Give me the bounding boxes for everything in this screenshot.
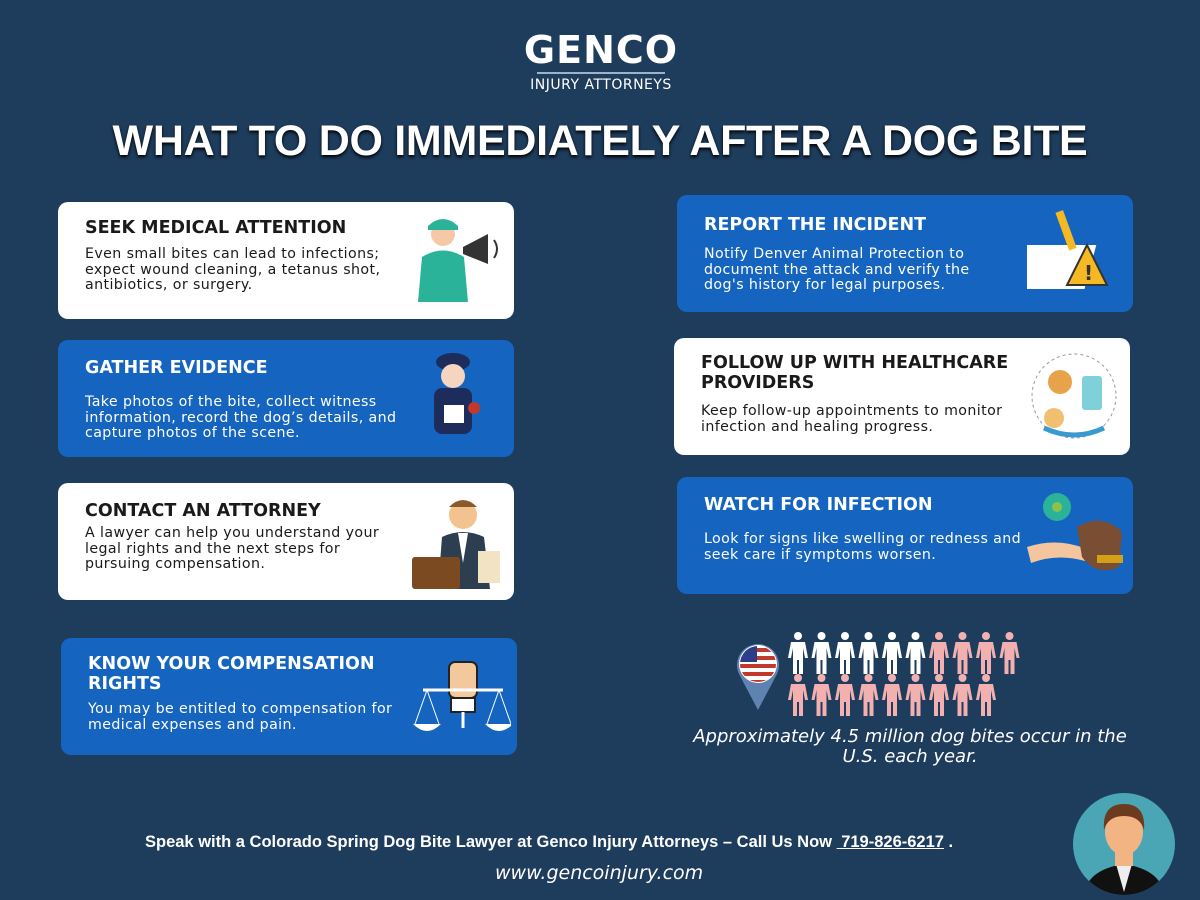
panel: seek medical attention: Even small bites can lead to infections; expect wound cleaning, a tetanus shot, antibiotics, or surgery. bbox=[85, 246, 380, 293]
panel: know your compensation rights: You may be entitled to compensation for medical expenses and pain. bbox=[88, 701, 392, 732]
panel: follow up with healthcare providers: Keep follow-up appointments to monitor infection and healing progress. bbox=[701, 403, 1002, 434]
logo: GENCO bbox=[524, 28, 678, 72]
panel: know your compensation rights bbox=[61, 638, 517, 755]
panel: follow up with healthcare providers: PROVIDERS bbox=[701, 373, 814, 393]
panel: know your compensation rights: KNOW YOUR COMPENSATION bbox=[88, 654, 375, 674]
panel: follow up with healthcare providers bbox=[674, 338, 1130, 455]
chart: people pictogram bbox=[788, 632, 1020, 716]
panel: gather evidence: Take photos of the bite, collect witness information, record the dog’s details, and capture photos of the scene. bbox=[85, 394, 396, 441]
icon: attorney with briefcase bbox=[412, 500, 500, 589]
icon: report document warning bbox=[1027, 210, 1108, 289]
panel: know your compensation rights: RIGHTS bbox=[88, 674, 162, 694]
panel: gather evidence bbox=[58, 340, 514, 457]
logo: INJURY ATTORNEYS bbox=[530, 77, 672, 93]
panel: contact an attorney: A lawyer can help you understand your legal rights and the next steps for pursuing compensation. bbox=[85, 525, 379, 572]
panel: gather evidence: GATHER EVIDENCE bbox=[85, 358, 268, 378]
panel: follow up with healthcare providers: FOLLOW UP WITH HEALTHCARE bbox=[701, 353, 1008, 373]
icon: nurse megaphone bbox=[418, 219, 498, 302]
footer website: www.gencoinjury.com bbox=[495, 862, 703, 884]
panel: contact an attorney: CONTACT AN ATTORNEY bbox=[85, 501, 321, 521]
icon: healthcare circle bbox=[1032, 354, 1116, 438]
icon: lawyer avatar bbox=[1073, 793, 1175, 895]
panel: report the incident: Notify Denver Animal Protection to document the attack and verify the dog's history for legal purposes. bbox=[704, 246, 970, 293]
panel: seek medical attention bbox=[58, 202, 514, 319]
logo bbox=[524, 28, 678, 93]
panel: watch for infection: WATCH FOR INFECTION bbox=[704, 495, 932, 515]
icon: report document warning: ! bbox=[1084, 261, 1093, 285]
statistic caption: Approximately 4.5 million dog bites occur in the U.S. each year. bbox=[693, 726, 1127, 767]
icon: police officer bbox=[434, 353, 480, 434]
icon: us flag location pin bbox=[737, 644, 779, 710]
title: WHAT TO DO IMMEDIATELY AFTER A DOG BITE bbox=[113, 117, 1087, 165]
panel: report the incident: REPORT THE INCIDENT bbox=[704, 215, 926, 235]
footer call to action: Speak with a Colorado Spring Dog Bite Lawyer at Genco Injury Attorneys – Call Us Now 719-826-6217 . bbox=[145, 833, 953, 851]
panel: contact an attorney bbox=[58, 483, 514, 600]
panel: report the incident bbox=[677, 195, 1133, 312]
panel: watch for infection bbox=[677, 477, 1133, 594]
icon: dog biting arm bbox=[1027, 493, 1123, 570]
icon: fist and scales bbox=[413, 661, 511, 731]
panel: watch for infection: Look for signs like swelling or redness and seek care if symptoms worsen. bbox=[704, 531, 1021, 562]
panel: seek medical attention: SEEK MEDICAL ATTENTION bbox=[85, 218, 346, 238]
